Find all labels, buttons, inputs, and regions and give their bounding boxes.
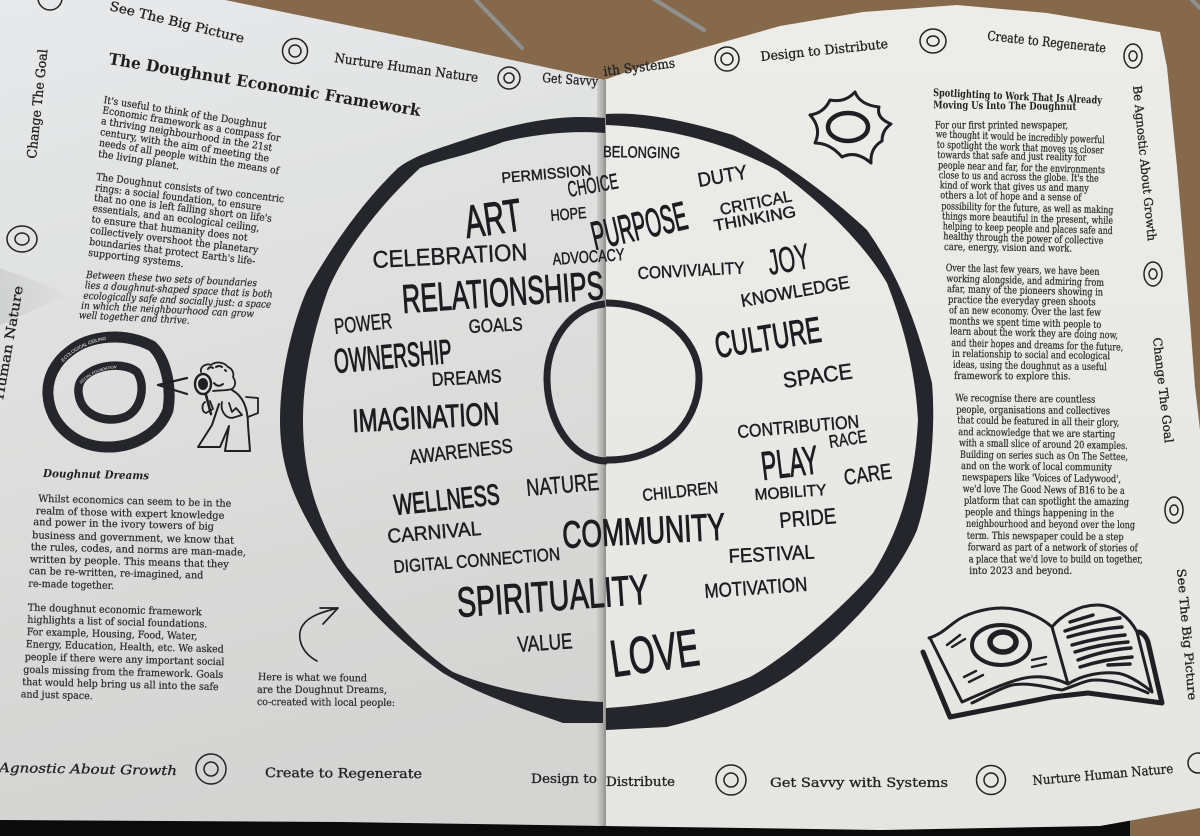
text block: spotlighting article: care, energy, vision and work. [944, 242, 1072, 255]
label: social foundation: SOCIAL FOUNDATION [80, 366, 116, 384]
text block: doughnut dreams: Energy, Education, Health, etc. We asked [26, 639, 224, 655]
doughnut dreams words: MOBILITY [754, 482, 827, 504]
doughnut dreams words: VALUE [517, 628, 573, 657]
text block: framework introduction: in which the neighbourhood can grow [81, 301, 255, 320]
text block: spotlighting article: things more beautiful in the present, while [942, 211, 1113, 227]
text block: spotlighting article: people and things happening in the [965, 507, 1114, 520]
doughnut dreams words: CONTRIBUTION [737, 411, 860, 442]
border strip: right slogans: See The Big Picture [1174, 568, 1199, 701]
text block: spotlighting article: helping to keep people and places safe and [943, 221, 1113, 237]
doughnut dreams words [332, 144, 893, 689]
doughnut dreams words: WELLNESS [392, 479, 501, 522]
text block: spotlighting article: platform that can spotlight the amazing [964, 496, 1130, 508]
text block: spotlighting article: of an new economy. Over the last few [949, 305, 1101, 319]
border strip: right slogans: Be Agnostic About Growth [1130, 85, 1159, 242]
doughnut dreams words: PURPOSE [587, 194, 692, 259]
doughnut dreams words: CRITICAL [719, 188, 794, 219]
caption: doughnut dreams: Here is what we found [258, 672, 368, 685]
title: The Doughnut Economic Framework [107, 49, 423, 120]
main doughnut inner ring [547, 303, 699, 461]
doughnut dreams words: GOALS [468, 314, 523, 338]
text block: spotlighting article: term. This newspaper could be a step [967, 531, 1124, 543]
text block: framework introduction: to ensure that humanity does not [91, 214, 248, 244]
border strip: top slogans: Create to Regenerate [987, 29, 1107, 56]
border strip: right slogans: Change The Goal [1150, 337, 1176, 444]
right newspaper page [604, 5, 1200, 830]
caption: doughnut dreams: are the Doughnut Dreams, [257, 685, 387, 696]
text block: spotlighting article: possibility for the future, as well as making [941, 201, 1114, 216]
heading: spotlighting: Spotlighting to Work That Is Already [933, 87, 1103, 107]
text block: doughnut dreams: For example, Housing, Food, Water, [27, 627, 198, 642]
border strip: top slogans [38, 0, 1107, 90]
text block: framework introduction: the living planet. [97, 149, 180, 172]
border strip: bottom slogans: Get Savvy with Systems [770, 776, 948, 791]
text block: framework introduction: that no one is left falling short on life's [93, 193, 272, 225]
icon: sun [810, 92, 891, 163]
text block: spotlighting article: framework to explore this. [954, 371, 1071, 382]
text block: spotlighting article: afar, many of the pioneers showing in [947, 284, 1104, 299]
black foreground strip [0, 818, 1130, 836]
doughnut dreams words: NATURE [525, 469, 600, 502]
border strip: top slogans: Design to Distribute [760, 37, 889, 65]
text block: doughnut dreams: business and government, we know that [32, 530, 234, 547]
text block: spotlighting article: others a lot of hope and a sense of [940, 190, 1082, 204]
text block: spotlighting article: newspapers like 'Voices of Ladywood', [962, 472, 1121, 485]
text block: spotlighting article: kind of work that gives us and many [940, 180, 1089, 194]
text block: doughnut dreams: that would help bring us all into the safe [22, 677, 219, 693]
doughnut dreams words: PRIDE [778, 503, 837, 533]
text block: spotlighting article: healthy through the power of collective [943, 231, 1104, 247]
left newspaper page [0, 0, 604, 826]
text block: spotlighting article: we thought it would be incredibly powerful [936, 129, 1105, 146]
text block: framework introduction: The Doughnut consists of two concentric [96, 172, 285, 205]
text block: doughnut dreams: highlights a list of social foundations. [27, 615, 207, 630]
text block: framework introduction: Between these two sets of boundaries [85, 270, 257, 289]
arrow pointing to doughnut [300, 608, 338, 661]
text block: spotlighting article: into 2023 and beyond. [969, 566, 1072, 577]
text block: doughnut dreams: people if there were any important social [25, 652, 225, 668]
text block: spotlighting article: forward as part of a network of stories of [968, 542, 1139, 554]
text block: spotlighting article: We recognise there are countless [955, 393, 1095, 406]
border strip: top slogans: See The Big Picture [108, 0, 246, 47]
doughnut dreams words: LOVE [607, 619, 703, 689]
text block: doughnut dreams: can be re-written, re-imagined, and [29, 566, 204, 582]
text block: spotlighting article: and acknowledge that we are starting [958, 427, 1116, 440]
label: ecological ceiling: ECOLOGICAL CEILING [61, 336, 106, 362]
doughnut dreams words: SPACE [781, 358, 854, 393]
text block: framework introduction: rings: a social foundation, to ensure [95, 183, 262, 213]
small doughnut diagram [42, 332, 175, 452]
text block: spotlighting article: we'd love The Good News of B16 to be a [963, 484, 1125, 497]
doughnut dreams words: RELATIONSHIPS [401, 264, 605, 322]
text block: doughnut dreams: the rules, codes, and norms are man-made, [31, 542, 246, 559]
doughnut dreams words: CHOICE [566, 168, 620, 202]
text block: framework introduction: lies a doughnut-shaped space that is both [85, 280, 273, 300]
doughnut dreams words: PLAY [759, 438, 821, 489]
text block: spotlighting article: with a small slice of around 20 examples. [959, 438, 1128, 452]
text block: spotlighting article: Over the last few years, we have been [946, 263, 1100, 278]
border strip: bottom slogans: Design to [531, 772, 597, 787]
text block: spotlighting article: and their hopes and dreams for the future, [951, 338, 1123, 354]
border strip: bottom slogans: Agnostic About Growth [0, 761, 177, 779]
text block: doughnut dreams: re-made together. [28, 579, 114, 592]
centre fold [597, 80, 606, 826]
text block: spotlighting article: that could be featured in all their glory, [957, 415, 1119, 429]
text block: spotlighting article: ideas, using the doughnut as a useful [953, 360, 1107, 373]
text block: framework introduction: Economic framework as a compass for [102, 105, 281, 144]
text block: spotlighting article: a place that we'd love to build on together, [969, 554, 1143, 565]
border strip: top slogans: Nurture Human Nature [333, 51, 479, 86]
doughnut dreams words: DIGITAL CONNECTION [393, 544, 561, 577]
caption: doughnut dreams: co-created with local people: [257, 697, 395, 709]
doughnut dreams words: ADVOCACY [552, 245, 625, 269]
text block: spotlighting article: practice the everyday green shoots [948, 295, 1096, 308]
doughnut dreams words: CARE [842, 459, 893, 490]
border strip: top slogans: Get Savvy [542, 71, 599, 90]
icon: character with magnifying glass [158, 363, 258, 451]
text block: doughnut dreams: goals missing from the framework. Goals [23, 665, 223, 681]
text block: doughnut dreams: Whilst economics can seem to be in the [38, 494, 232, 510]
border strip: bottom slogans: Distribute [606, 775, 675, 790]
text block: framework introduction: ecologically safe and socially just: a space [83, 291, 272, 311]
doughnut dreams words: COMMUNITY [561, 507, 726, 557]
doughnut dreams words: AWARENESS [408, 435, 514, 469]
text block: framework introduction: century, with the aim of meeting the [99, 127, 270, 165]
main doughnut outer ring [280, 114, 933, 730]
text block: doughnut dreams: The doughnut economic framework [28, 603, 203, 618]
text block: framework introduction [79, 95, 285, 327]
text block: spotlighting article: people, organisations and collectives [956, 405, 1110, 417]
border strip: bottom slogans [0, 754, 1174, 795]
text block: spotlighting article: working alongside, and admiring from [946, 274, 1105, 289]
page shadow [0, 268, 70, 325]
doughnut dreams words: CULTURE [712, 309, 824, 366]
text block: spotlighting article: and on the work of local community [961, 461, 1112, 474]
border strip: bottom slogans: Create to Regenerate [265, 766, 422, 782]
text block: framework introduction: essentials, and an ecological ceiling, [92, 203, 260, 234]
pens on the table [474, 0, 1200, 48]
doughnut dreams words: CONVIVIALITY [637, 258, 745, 283]
border strip: bottom slogans: Nurture Human Nature [1032, 762, 1174, 789]
text block: framework introduction: needs of all people within the means of [98, 138, 281, 177]
doughnut dreams words: THINKING [713, 204, 797, 235]
text block: spotlighting article: For our first printed newspaper, [935, 120, 1068, 131]
doughnut dreams words: DUTY [696, 162, 749, 192]
doughnut dreams words: BELONGING [603, 144, 680, 162]
text block: spotlighting article: learn about the work they are doing now, [950, 326, 1118, 341]
caption: doughnut dreams [257, 672, 395, 709]
text block: spotlighting article [935, 120, 1143, 577]
doughnut dreams words: JOY [764, 235, 813, 283]
doughnut dreams words: RACE [827, 426, 868, 452]
text block: framework introduction: boundaries that protect Earth's life- [89, 237, 256, 267]
icon: open book [923, 605, 1162, 717]
doughnut dreams words: HOPE [550, 205, 587, 225]
doughnut dreams words: IMAGINATION [351, 395, 500, 439]
doughnut dreams words: SPIRITUALITY [455, 566, 650, 626]
doughnut dreams words: DREAMS [431, 366, 502, 391]
text block: spotlighting article: in relationship to social and ecological [952, 349, 1110, 362]
text block: spotlighting article: close to us and across the globe. It's the [939, 170, 1099, 185]
border strip: left slogans [0, 48, 51, 401]
doughnut dreams words: MOTIVATION [704, 574, 808, 603]
text block: doughnut dreams: written by people. This means that they [30, 554, 229, 571]
text block: spotlighting article: Building on series such as On The Settee, [960, 450, 1128, 463]
text block: spotlighting article: neighbourhood and beyond over the long [966, 519, 1136, 531]
doughnut dreams words: FESTIVAL [728, 542, 815, 568]
border strip: right slogans [1124, 44, 1200, 773]
text block: framework introduction: collectively overshoot the planetary [90, 225, 259, 256]
doughnut dreams words: POWER [333, 308, 393, 339]
text block: framework introduction: supporting systems. [88, 248, 184, 270]
text block: doughnut dreams: and just space. [21, 689, 93, 702]
text block: doughnut dreams: realm of those with expert knowledge [36, 506, 225, 522]
text block: spotlighting article: months we spent time with people to [949, 316, 1101, 331]
doughnut dreams words: PERMISSION [501, 162, 592, 187]
text block: framework introduction: It's useful to think of the Doughnut [103, 95, 268, 132]
doughnut dreams words: ART [461, 188, 525, 248]
border strip: left slogans: Change The Goal [25, 48, 51, 159]
text block: doughnut dreams [21, 494, 246, 702]
text block: spotlighting article: to spotlight the work that moves us closer [937, 140, 1104, 157]
doughnut dreams words: OWNERSHIP [332, 333, 453, 381]
text block: spotlighting article: people near and far, for the environments [938, 160, 1105, 176]
text block: spotlighting article: towards that safe and just reality for [937, 150, 1087, 164]
heading: spotlighting: Moving Us Into The Doughnut [933, 99, 1077, 113]
text block: framework introduction: a thriving neighbourhood in the 21st [100, 116, 273, 154]
doughnut dreams words: CELEBRATION [372, 239, 528, 274]
text block: framework introduction: well together and thrive. [79, 310, 190, 327]
doughnut dreams words: KNOWLEDGE [739, 272, 851, 311]
heading: spotlighting [933, 87, 1103, 113]
doughnut dreams words: CARNIVAL [387, 518, 482, 548]
text block: doughnut dreams: and power in the ivory towers of big [33, 517, 215, 533]
doughnut dreams words: CHILDREN [641, 478, 719, 505]
border strip: top slogans: ith Systems [603, 56, 676, 80]
heading: doughnut dreams: Doughnut Dreams [42, 467, 149, 482]
